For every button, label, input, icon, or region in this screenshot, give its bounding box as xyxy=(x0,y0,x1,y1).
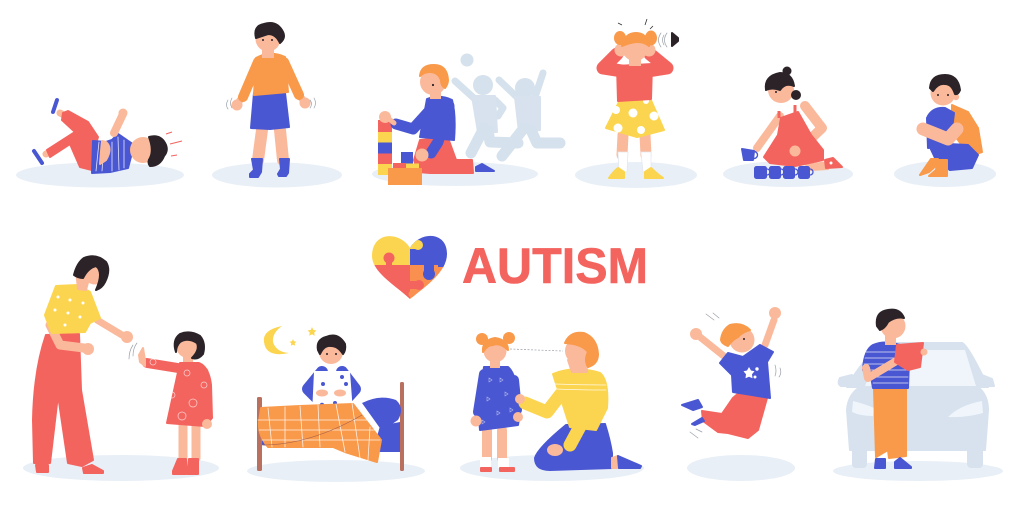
boy xyxy=(863,310,928,468)
scene: boy stacking blocks with shadow children playing behind xyxy=(372,54,560,186)
icon: loudspeaker with sound waves xyxy=(658,33,678,47)
mother xyxy=(33,256,133,473)
scene: boy having a tantrum on the floor xyxy=(16,100,184,188)
kneeling mother xyxy=(515,333,641,470)
dashed gaze line xyxy=(510,349,563,351)
girl xyxy=(129,332,212,474)
car silhouette xyxy=(839,343,994,468)
scene: sad boy hugging knees xyxy=(894,75,996,187)
scene: girl repeatedly arranging cups xyxy=(723,66,853,187)
block tower xyxy=(378,120,392,175)
scene: excited boy jumping xyxy=(682,307,795,481)
boy in star pajamas xyxy=(308,336,355,424)
bed frame xyxy=(257,382,404,471)
girl xyxy=(470,332,523,471)
row of blue cups xyxy=(755,167,813,178)
scene: sleepless boy sitting up in bed at night xyxy=(247,326,425,482)
scene: girl avoiding eye contact with kneeling mother xyxy=(460,332,644,481)
silhouettes of playing children xyxy=(455,54,560,156)
scene: standing boy flapping hands xyxy=(212,23,342,188)
scene: girl refusing contact from her mother xyxy=(23,256,219,481)
title: AUTISM xyxy=(462,238,648,294)
logo: puzzle piece heart xyxy=(372,236,447,299)
crescent moon and stars xyxy=(264,326,316,354)
scene: girl covering ears from loud noise xyxy=(575,19,697,188)
plaid orange blanket xyxy=(258,403,381,462)
scene: boy reading a book in front of a car xyxy=(833,310,1003,481)
